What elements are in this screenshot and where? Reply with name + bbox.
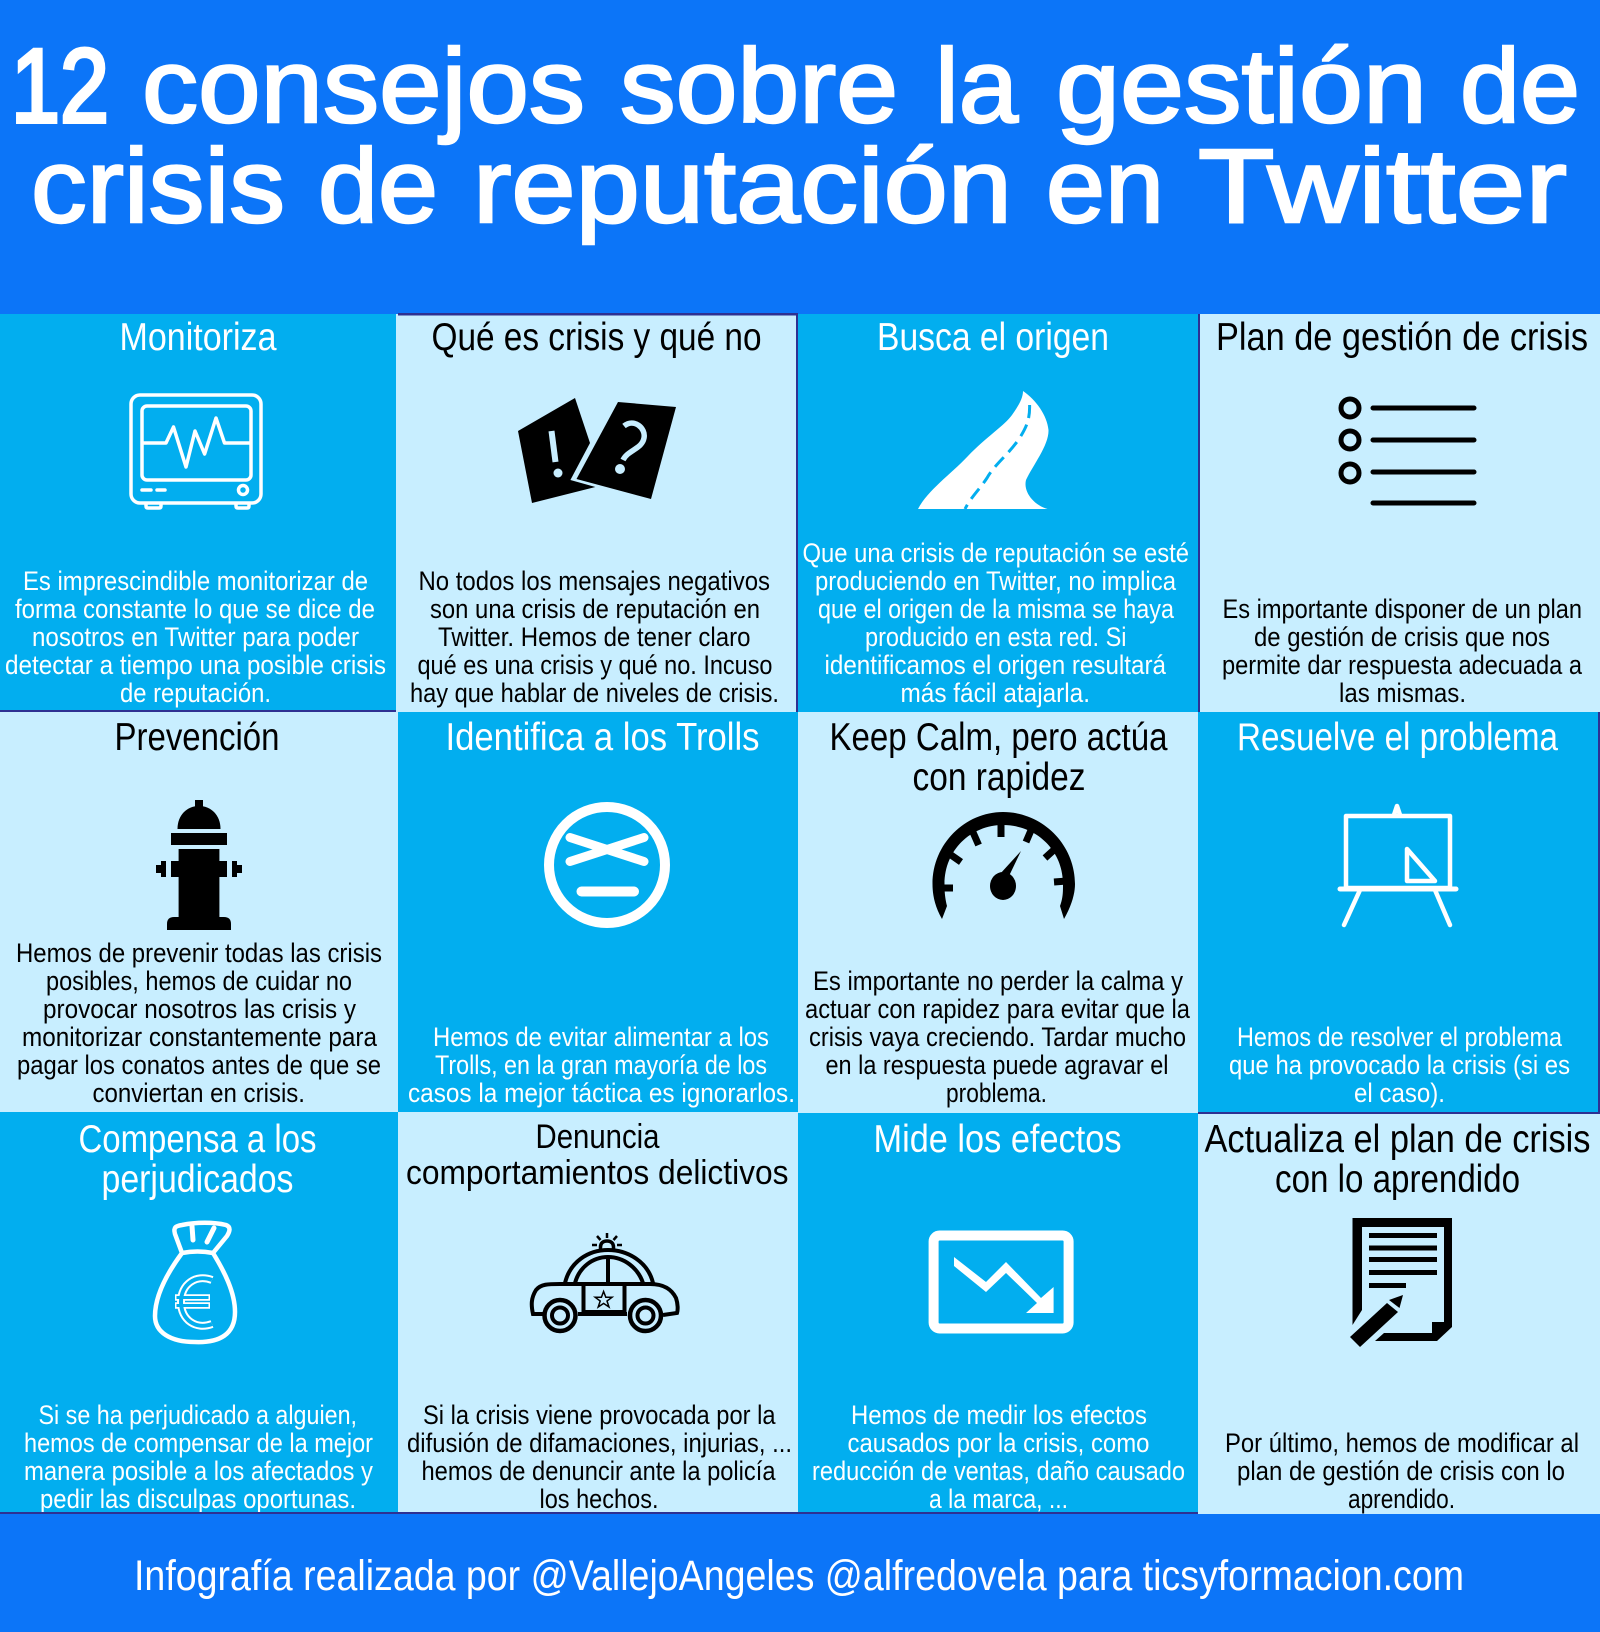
icon: easel board	[1340, 806, 1456, 925]
panel: Mide los efectos	[798, 1113, 1198, 1514]
body text: plan de gestión de crisis con lo	[1237, 1456, 1565, 1486]
panel: Denuncia comportamientos delictivos	[398, 1112, 798, 1514]
title: reputación	[473, 128, 1012, 245]
body text	[802, 538, 1189, 708]
title	[11, 28, 1580, 245]
body text	[1225, 1428, 1579, 1514]
icon: document with pencil	[1350, 1218, 1452, 1347]
body text: detectar a tiempo una posible crisis	[5, 650, 386, 680]
body text	[16, 938, 382, 1108]
title: sobre	[620, 28, 898, 145]
body text: problema.	[946, 1078, 1047, 1108]
body text: Trolls, en la gran mayoría de los	[435, 1050, 767, 1080]
body text	[410, 566, 779, 708]
body text: No todos los mensajes negativos	[418, 566, 770, 596]
panel: Plan de gestión de crisis	[1198, 314, 1600, 712]
heading: con rapidez	[912, 756, 1086, 799]
body text: más fácil atajarla.	[900, 678, 1090, 708]
icon: fire hydrant	[156, 800, 242, 930]
body text: crisis vaya creciendo. Tardar mucho	[809, 1022, 1186, 1052]
title: la	[935, 28, 1019, 145]
heading: Monitoriza	[120, 316, 277, 359]
body text	[407, 1400, 792, 1514]
heading: perjudicados	[102, 1158, 294, 1201]
panel: Actualiza el plan de crisis con lo aprendido	[1198, 1113, 1600, 1514]
icon: money bag	[155, 1223, 235, 1342]
body text: los hechos.	[540, 1484, 658, 1514]
icon: falling chart	[934, 1236, 1069, 1328]
heading	[406, 1118, 788, 1192]
body text	[408, 1022, 795, 1108]
body text: las mismas.	[1339, 678, 1466, 708]
heading: comportamientos delictivos	[406, 1154, 788, 1192]
title: 12	[11, 28, 109, 145]
body text: de reputación.	[120, 678, 271, 708]
title: de	[1460, 28, 1580, 145]
body text	[812, 1400, 1185, 1514]
heading: con lo aprendido	[1275, 1158, 1520, 1201]
body text: reducción de ventas, daño causado	[812, 1456, 1185, 1486]
icon: road	[918, 391, 1049, 509]
body text: pagar los conatos antes de que se	[17, 1050, 381, 1080]
heading: Identifica a los Trolls	[446, 716, 760, 759]
body text: en la respuesta puede agravar el	[826, 1050, 1168, 1080]
panel: Identifica a los Trolls	[398, 712, 798, 1113]
body text: Si la crisis viene provocada por la	[423, 1400, 776, 1430]
title: consejos	[142, 28, 585, 145]
body text: a la marca, ...	[929, 1484, 1068, 1514]
body text: aprendido.	[1348, 1484, 1455, 1514]
icon: exclamation and question cards	[518, 398, 676, 503]
body text: provocar nosotros las crisis y	[43, 994, 356, 1024]
body text: manera posible a los afectados y	[24, 1456, 373, 1486]
heading: Keep Calm, pero actúa	[830, 716, 1168, 759]
title: gestión	[1056, 28, 1427, 145]
body text: qué es una crisis y qué no. Incuso	[418, 650, 772, 680]
body text: hemos de compensar de la mejor	[24, 1428, 373, 1458]
body text: actuar con rapidez para evitar que la	[805, 994, 1191, 1024]
panel: Monitoriza	[0, 314, 397, 712]
body text	[24, 1400, 373, 1514]
body text: monitorizar constantemente para	[22, 1022, 378, 1052]
body text: nosotros en Twitter para poder	[32, 622, 359, 652]
panel: Compensa a los perjudicados	[0, 1112, 398, 1514]
panel: Keep Calm, pero actúa con rapidez	[798, 712, 1198, 1113]
icon: police car	[532, 1233, 678, 1331]
body text: hay que hablar de niveles de crisis.	[410, 678, 779, 708]
body text: causados por la crisis, como	[848, 1428, 1150, 1458]
heading: Prevención	[114, 716, 280, 759]
body text: Es imprescindible monitorizar de	[23, 566, 368, 596]
heading	[830, 716, 1168, 799]
body text: producido en esta red. Si	[865, 622, 1126, 652]
title: Twitter	[1198, 128, 1567, 245]
body text: Que una crisis de reputación se esté	[802, 538, 1189, 568]
body text: posibles, hemos de cuidar no	[46, 966, 352, 996]
icon: monitor	[131, 395, 261, 508]
body text	[805, 966, 1191, 1108]
heading: Compensa a los	[78, 1118, 316, 1161]
panel: Busca el origen	[798, 314, 1198, 712]
panel: Resuelve el problema	[1198, 712, 1600, 1114]
panel: Qué es crisis y qué no	[396, 313, 798, 712]
body text: de gestión de crisis que nos	[1254, 622, 1550, 652]
body text: casos la mejor táctica es ignorarlos.	[408, 1078, 795, 1108]
body text	[1222, 594, 1583, 708]
panel: Prevención	[0, 712, 398, 1113]
body text: identificamos el origen resultará	[824, 650, 1167, 680]
title: en	[1046, 128, 1164, 245]
body text: Twitter. Hemos de tener claro	[438, 622, 750, 652]
body text: produciendo en Twitter, no implica	[815, 566, 1177, 596]
icon: checklist	[1341, 399, 1474, 503]
body text: el caso).	[1354, 1078, 1445, 1108]
body text	[1229, 1022, 1570, 1108]
body text: hemos de denuncir ante la policía	[422, 1456, 776, 1486]
body text: pedir las disculpas oportunas.	[40, 1484, 356, 1514]
icon: face	[549, 807, 665, 923]
icon: speedometer	[932, 812, 1075, 919]
heading: Mide los efectos	[874, 1118, 1122, 1161]
title: de	[318, 128, 438, 245]
body text: Hemos de medir los efectos	[851, 1400, 1147, 1430]
heading: Busca el origen	[877, 316, 1109, 359]
body text: forma constante lo que se dice de	[15, 594, 375, 624]
title: crisis	[31, 128, 285, 245]
heading: Qué es crisis y qué no	[432, 316, 762, 359]
heading	[1204, 1118, 1590, 1201]
body text: Si se ha perjudicado a alguien,	[38, 1400, 357, 1430]
heading: Denuncia	[536, 1118, 660, 1156]
body text: Es importante no perder la calma y	[813, 966, 1183, 996]
body text: difusión de difamaciones, injurias, ...	[407, 1428, 792, 1458]
heading	[78, 1118, 316, 1201]
body text	[5, 566, 386, 708]
body text: son una crisis de reputación en	[430, 594, 760, 624]
body text: Hemos de evitar alimentar a los	[433, 1022, 769, 1052]
body text: conviertan en crisis.	[92, 1078, 305, 1108]
body text: Hemos de prevenir todas las crisis	[16, 938, 382, 968]
body text: que el origen de la misma se haya	[818, 594, 1175, 624]
